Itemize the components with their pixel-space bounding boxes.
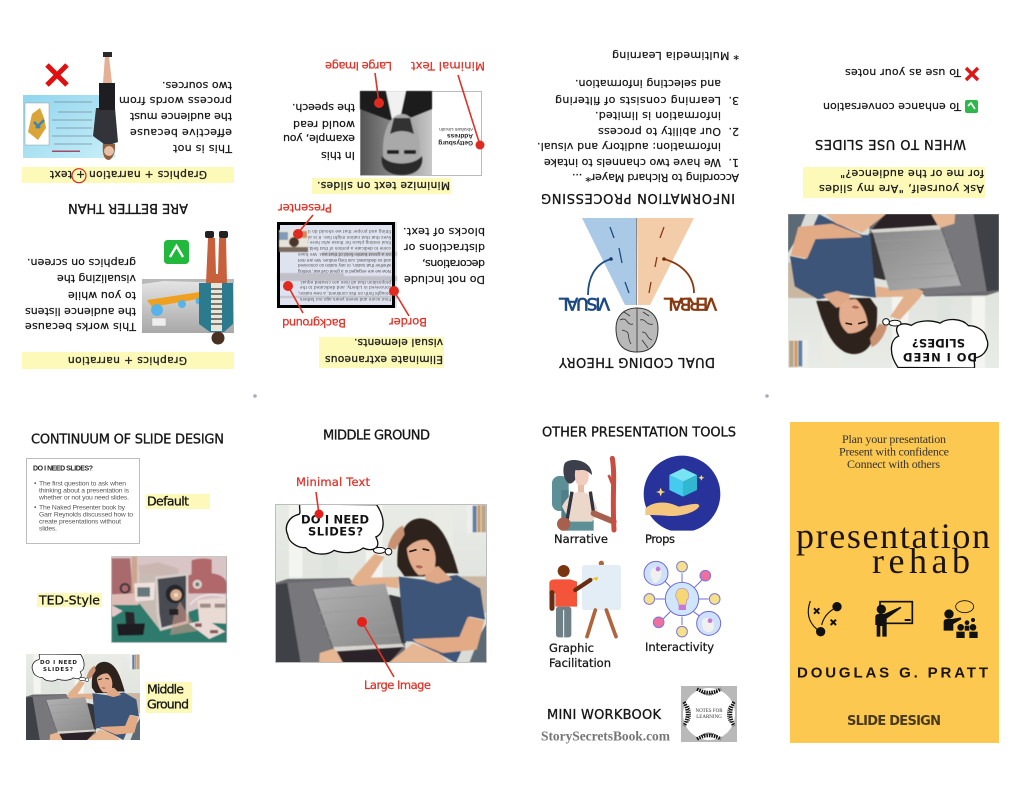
text: in this example: the speech.: [292, 101, 355, 114]
text: this works because: the audience listens: [25, 305, 136, 318]
text: this is not effective: two sources.: [162, 79, 232, 92]
text: do not include: distractions or: [404, 241, 485, 254]
photo: woman with laptop and thought bubble: [275, 504, 487, 663]
icon: graphic facilitation: [549, 561, 621, 637]
fold marker right: [765, 394, 769, 398]
slide example: cluttered slide: Now we are engaged in a great civil war, testing: [298, 269, 391, 274]
pointer: background: [283, 281, 303, 313]
text: this is not effective: process words from: [119, 94, 232, 107]
panel: continuum of slide design: [26, 432, 227, 740]
slide example: default bullets: The first question to ask when: [39, 480, 126, 488]
callout: eliminate extraneous visual elements: Eliminate extraneous: [325, 353, 443, 365]
pointer: border: [389, 286, 409, 316]
subtitle: slide design: SLIDE DESIGN: [847, 714, 941, 729]
text: this is not effective: This is not: [172, 142, 233, 155]
label: graphic facilitation: Graphic: [549, 641, 594, 655]
label: graphic facilitation: [549, 641, 611, 670]
title: presentation rehab: presentation: [796, 516, 990, 556]
text: this works because: to you while: [68, 289, 136, 302]
label: minimal text: Minimal Text: [296, 475, 370, 489]
label: large image: Large Image: [364, 678, 431, 692]
text: to enhance conversation: To enhance conversation: [823, 100, 962, 113]
label: background: Background: [282, 316, 346, 330]
label: props: Props: [645, 532, 675, 546]
heading: continuum of slide design: CONTINUUM OF SLIDE DESIGN: [31, 432, 224, 448]
text: in this example: would read: [293, 118, 355, 131]
callout: graphics narration text: Graphics + narration + text: [50, 168, 207, 180]
heading: information processing: INFORMATION PROCESSING: [541, 190, 735, 205]
text block: Mayer principles: Learning consists of filtering: [555, 94, 721, 107]
photo: woman on laptop with thought bubble: SLIDES?: [912, 336, 965, 350]
tag: default: [146, 494, 210, 509]
image: notes for learning: [681, 686, 737, 742]
icon: speaker with audience: [944, 601, 978, 638]
panel: dual coding theory: [537, 49, 739, 369]
tag: TED-style: TED-Style: [38, 592, 100, 608]
slide example: cluttered slide: brought forth on this continent, a new nation,: [298, 291, 391, 296]
slide example: cluttered slide: come to dedicate a portion of that field, as a: [298, 246, 391, 251]
pointer: large image: [374, 73, 384, 108]
photo: woman on laptop with thought bubble: DO I NEED: [903, 350, 977, 364]
slide example: cluttered slide: fitting and proper that we should do it: [307, 229, 391, 234]
text: this works because: graphics on screen.: [27, 256, 136, 269]
heading: other presentation tools: OTHER PRESENTATION TOOLS: [542, 426, 736, 440]
link text: story secrets book: StorySecretsBook.com: [541, 728, 671, 744]
slide example: cluttered slide: conceived in Liberty, and dedicated to the: [300, 285, 391, 290]
panel: other presentation tools: [541, 426, 737, 744]
panel: book cover: [790, 422, 999, 743]
photo: woman with laptop and thought bubble: SLIDES?: [308, 524, 363, 538]
fold marker left: [253, 394, 257, 398]
slide example: default bullets: [26, 458, 140, 544]
tag: middle ground: Middle: [147, 682, 184, 696]
text: in this example: example, you: [283, 132, 355, 145]
slide example: cluttered slide: Four score and seven years ago our fathers: [299, 297, 391, 302]
panel: minimize text: [283, 59, 485, 194]
label: presenter: Presenter: [278, 201, 332, 215]
text block: tagline: Connect with others: [847, 457, 940, 471]
upside-down top half of the brochure: [22, 49, 999, 369]
callout: minimize text on slides: Minimize text on slides.: [317, 179, 450, 191]
photo: slide projector: [112, 557, 227, 642]
label: large image: Large Image: [325, 59, 392, 73]
slide example: cluttered slide: final resting place for those who here gave: [298, 240, 391, 245]
label: border: Border: [389, 315, 427, 329]
text: to use as your notes: To use as your notes: [845, 66, 962, 79]
text: this works because: [25, 256, 137, 333]
text: this is not effective: the audience must: [129, 110, 232, 123]
text: this works because: visualizing the: [57, 272, 136, 285]
text: in this example: In this: [321, 149, 355, 162]
slide example: cluttered slide: [277, 222, 397, 308]
label: graphic facilitation: Facilitation: [549, 656, 611, 670]
footnote: multimedia learning: * Multimedia Learning: [612, 49, 739, 62]
author name: DOUGLAS G. PRATT: [797, 664, 988, 682]
slide example: cluttered slide: and so dedicated, can long endure. We are met: [297, 258, 391, 263]
icon: strategy play: [808, 601, 842, 636]
text: this is not effective: [119, 79, 233, 155]
slide example: cluttered slide: proposition that all men are created equal.: [300, 280, 391, 285]
panel: middle ground: [275, 428, 487, 692]
callout: ask yourself: Ask yourself, "Are my slides: [819, 182, 984, 195]
pointer: large image: [357, 617, 394, 677]
pointer: minimal text: [458, 75, 484, 150]
callout: eliminate extraneous visual elements: visual elements.: [354, 336, 443, 348]
photo: middle ground thumbnail: [26, 654, 140, 740]
diagram: brain with two channels: VISUAL: [558, 293, 610, 313]
heading: dual coding theory: DUAL CODING THEORY: [559, 354, 715, 369]
text block: tagline: Present with confidence: [839, 444, 949, 458]
slide example: cluttered slide: whether that nation, or any nation so conceived: [298, 263, 391, 268]
slide example: default bullets: whether or not you need slides.: [38, 494, 129, 502]
text block: Mayer principles: 2.: [728, 125, 739, 138]
heading: are better than: ARE BETTER THAN: [68, 200, 188, 215]
callout: graphics plus narration: Graphics + narration: [68, 354, 187, 366]
callout: graphics narration text: [22, 167, 234, 183]
text block: Mayer principles: 3.: [728, 94, 739, 107]
text block: Mayer principles: information: auditory and visual.: [537, 140, 721, 153]
panel: when to use slides: [788, 66, 999, 368]
label: narrative: Narrative: [554, 532, 608, 546]
icon: props: [644, 456, 720, 532]
text block: tagline: [839, 432, 949, 471]
text: do not include: [403, 225, 485, 286]
slide example: Gettysburg Address with Lincoln: Gettysburg: [438, 139, 473, 146]
icon: green check button: [164, 240, 189, 264]
icon: red x: [966, 68, 978, 80]
photo: middle ground thumbnail: DO I NEED: [40, 660, 77, 666]
text: in this example: [283, 101, 355, 162]
heading: when to use slides: WHEN TO USE SLIDES: [815, 136, 966, 151]
text block: Mayer principles: Our ability to process: [598, 125, 721, 138]
slide example: cluttered slide: lives that that nation might live. It is al: [308, 235, 391, 240]
image: notes for learning: LEARNING: [696, 715, 722, 720]
slide example: default bullets: •: [34, 504, 37, 512]
heading: middle ground: MIDDLE GROUND: [323, 428, 430, 444]
illustration: presenter with process graphic: [142, 231, 234, 344]
slide example: default bullets: slides.: [39, 526, 57, 532]
panel: eliminate extraneous: [277, 201, 485, 368]
pointer: minimal text: [314, 492, 324, 518]
slide example: default bullets: create presentations without: [39, 518, 121, 526]
label: interactivity: Interactivity: [645, 640, 714, 654]
slide example: default bullets: •: [34, 480, 37, 488]
callout: eliminate extraneous visual elements: [319, 336, 444, 368]
text block: Mayer principles: 1.: [728, 156, 739, 169]
icon: green check: [965, 100, 978, 113]
text block: Mayer principles: [537, 77, 739, 184]
photo: middle ground thumbnail: SLIDES?: [43, 667, 73, 673]
text: do not include: Do not include: [404, 273, 485, 286]
cover background: [790, 422, 999, 743]
title: presentation rehab: rehab: [872, 541, 970, 581]
panel: graphics plus narration: [22, 52, 234, 369]
slide example: Gettysburg Address with Lincoln: Address: [447, 132, 473, 139]
text: this is not effective: effective because: [130, 126, 232, 139]
slide example: Gettysburg Address with Lincoln: [360, 91, 482, 176]
text block: Mayer principles: information is limited.: [595, 109, 721, 122]
diagram: brain with two channels: VERBAL: [663, 293, 717, 313]
slide example: default bullets: The Naked Presenter book by: [39, 504, 126, 512]
callout: graphics plus narration: [22, 352, 234, 369]
icon: red x: [47, 65, 67, 85]
text block: Mayer principles: According to Richard Mayer* ...: [572, 171, 739, 184]
slide example: default bullets: Garr Reynolds discussed how to: [39, 512, 133, 518]
photo: woman on laptop with thought bubble: [788, 214, 999, 368]
photo: woman with laptop and thought bubble: DO I NEED: [301, 512, 369, 526]
heading: mini workbook: MINI WORKBOOK: [547, 708, 661, 723]
text block: tagline: Plan your presentation: [842, 432, 946, 446]
text block: Mayer principles: and selecting information.: [575, 77, 721, 90]
text block: Mayer principles: We have two channels to intake: [544, 156, 721, 169]
text: do not include: blocks of text.: [403, 225, 485, 238]
illustration: presenter with text heavy slide: [23, 52, 118, 160]
label: minimal text: Minimal Text: [411, 59, 485, 73]
tag: default: Default: [147, 494, 189, 508]
text: this works because: This works because: [25, 320, 137, 333]
slide example: Gettysburg Address with Lincoln: Abraham Lincoln: [439, 127, 473, 132]
slide example: cluttered slide: on a great battle-field of that war. We have: [298, 252, 391, 257]
text: do not include: decorations,: [422, 257, 485, 270]
icon: interactivity network: [644, 561, 721, 637]
pointer: presenter: [293, 215, 313, 239]
diagram: brain with two channels: [558, 218, 717, 352]
slide example: default bullets: DO I NEED SLIDES?: [33, 466, 93, 472]
tag: middle ground: Ground: [147, 696, 189, 712]
tag: middle ground: [146, 682, 192, 713]
callout: ask yourself: [803, 167, 985, 198]
image: notes for learning: NOTES FOR: [695, 709, 723, 714]
icon: narrative hiker: [552, 458, 614, 531]
title: presentation rehab: [796, 516, 990, 581]
callout: ask yourself: for me or the audience?": [840, 167, 984, 180]
icon: teacher at board: [875, 602, 912, 637]
slide example: default bullets: thinking about a presentation is: [39, 488, 130, 494]
